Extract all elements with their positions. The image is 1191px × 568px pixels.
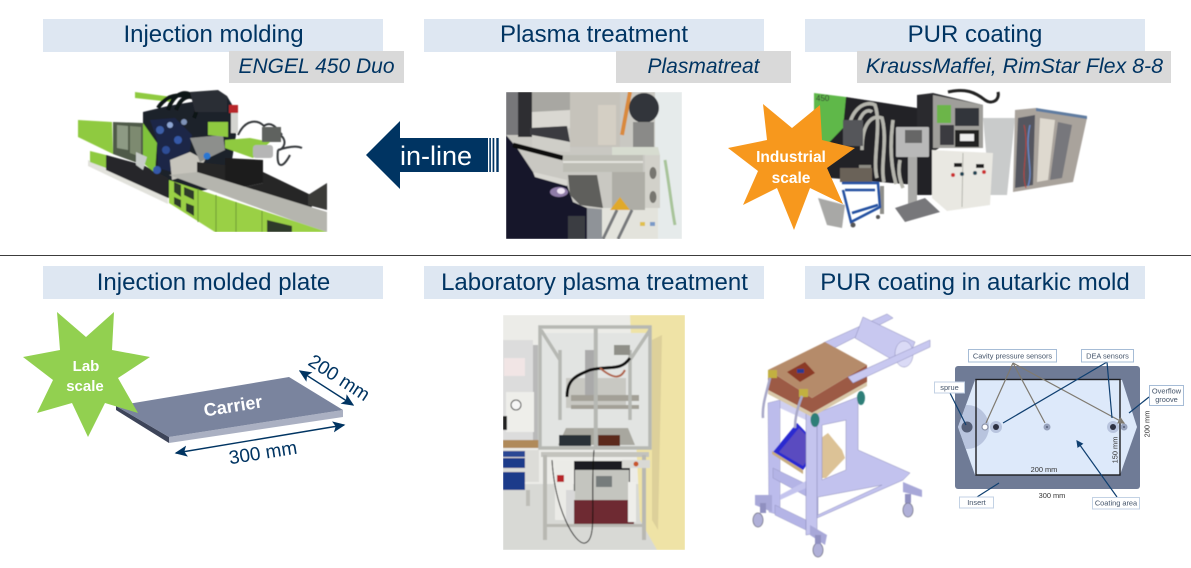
- badge: Industrial scale: [728, 104, 855, 230]
- badge: Industrial scale: scale: [772, 170, 811, 187]
- arrow: in-line: [366, 121, 499, 189]
- heading: Injection molded plate: [43, 266, 383, 299]
- dimension: 300 mm: [176, 425, 344, 469]
- dimension labels: 200 mm: [1031, 465, 1057, 474]
- label: Plasmatreat: [616, 51, 791, 83]
- callout: DEA sensors: [1082, 350, 1134, 362]
- dimension labels: 150 mm: [1110, 437, 1120, 463]
- arrow: in-line: in-line: [400, 141, 472, 171]
- callout: DEA sensors: DEA sensors: [1086, 352, 1129, 361]
- callout: Overflow groove: [1150, 386, 1184, 406]
- callout: sprue: sprue: [940, 383, 959, 392]
- photo: laboratory plasma unit: [503, 315, 685, 550]
- heading: Plasma treatment: [424, 19, 764, 52]
- photo: PUR coating machine: [814, 90, 1087, 228]
- callout: Cavity pressure sensors: [968, 350, 1056, 362]
- dimension: 200 mm: 200 mm: [304, 351, 373, 406]
- callout: Overflow groove: Overflow: [1152, 386, 1182, 396]
- leader arrows: [950, 362, 1149, 497]
- label: KraussMaffei, RimStar Flex 8-8: KraussMaffei, RimStar Flex 8-8: [866, 54, 1163, 78]
- heading: PUR coating: [805, 19, 1145, 52]
- badge: Industrial scale: Industrial: [756, 149, 826, 166]
- badge: Lab scale: [23, 312, 150, 437]
- photo: plasma nozzle: [506, 92, 682, 239]
- overflow and coating area: [958, 380, 1137, 475]
- dimension labels: [1031, 411, 1152, 500]
- diagram: mold insert schematic: [934, 350, 1184, 509]
- carrier plate: [116, 377, 343, 443]
- heading: Injection molding: [43, 19, 383, 52]
- heading: PUR coating in autarkic mold: PUR coating in autarkic mold: [820, 269, 1130, 296]
- CAD model: mold cart: [753, 314, 930, 557]
- heading: Injection molding: Injection molding: [123, 21, 304, 48]
- dimension labels: 200 mm: [1142, 411, 1152, 437]
- photo: injection molding machine: [78, 90, 327, 232]
- callout: Insert: [960, 497, 994, 508]
- label: Plasmatreat: Plasmatreat: [647, 55, 761, 78]
- sprue and sensors: [962, 421, 1128, 433]
- dimension: 300 mm: 300 mm: [228, 438, 299, 469]
- label: ENGEL 450 Duo: ENGEL 450 Duo: [238, 55, 395, 78]
- callout: sprue: [934, 382, 964, 393]
- badge: Lab scale: scale: [66, 378, 104, 395]
- photo: PUR coating machine: 450: [816, 94, 830, 103]
- callout: Cavity pressure sensors: Cavity pressure sensors: [973, 352, 1052, 361]
- divider: [0, 254, 1191, 256]
- heading: Injection molded plate: Injection molded plate: [97, 269, 330, 296]
- dimension labels: 300 mm: [1039, 491, 1065, 500]
- heading: PUR coating: PUR coating: [908, 21, 1042, 48]
- carrier plate: Carrier: [202, 392, 264, 420]
- badge: Lab scale: Lab: [73, 358, 99, 375]
- label: ENGEL 450 Duo: [229, 51, 404, 83]
- heading: Laboratory plasma treatment: Laboratory plasma treatment: [441, 269, 748, 296]
- callout: Coating area: Coating area: [1095, 499, 1138, 508]
- callout: Insert: Insert: [967, 498, 986, 507]
- insert body: [955, 366, 1140, 489]
- callout: Overflow groove: groove: [1155, 395, 1178, 404]
- heading: Plasma treatment: Plasma treatment: [500, 21, 688, 48]
